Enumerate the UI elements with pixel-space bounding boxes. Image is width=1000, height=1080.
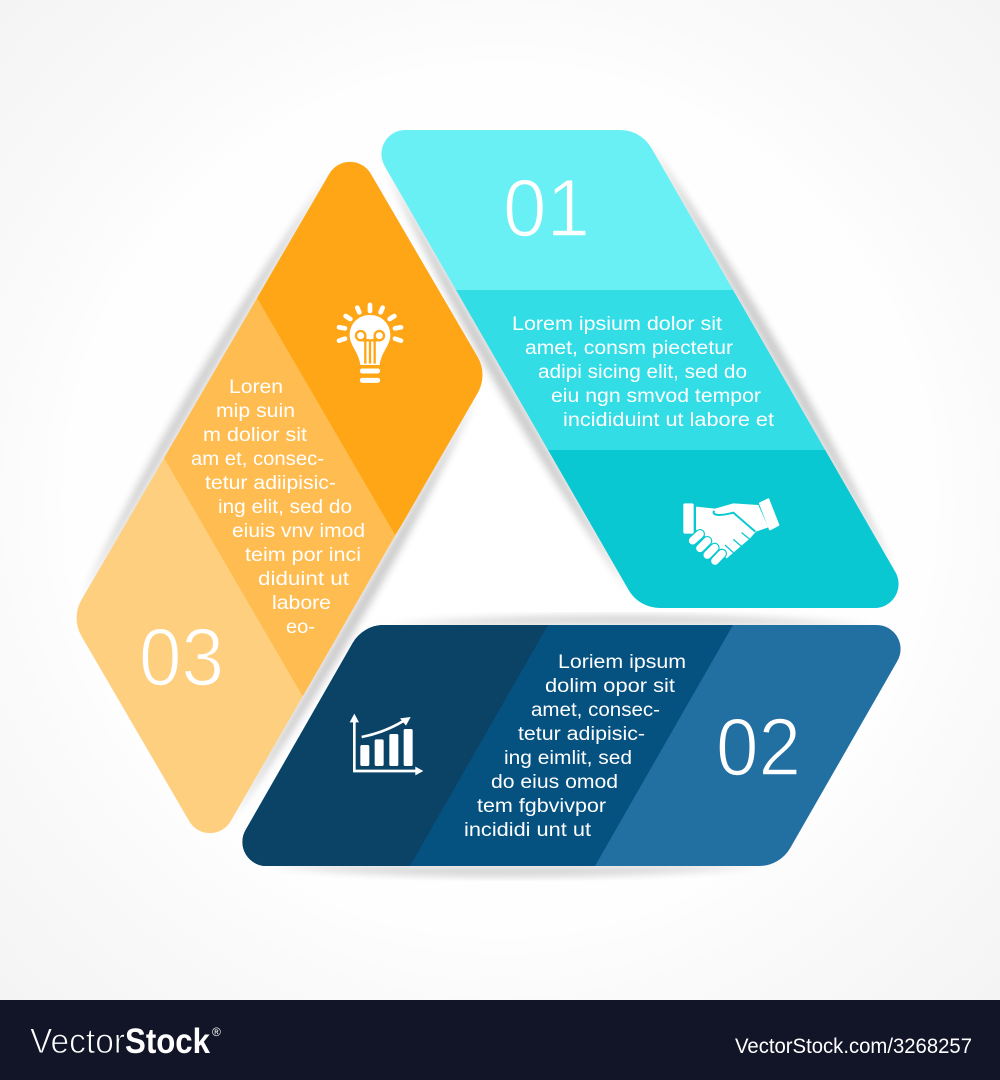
number 03: 03: [139, 612, 224, 703]
icon: bar chart with rising arrow: [350, 714, 423, 775]
panel 02 body text: ing eimlit, sed: [504, 748, 632, 769]
panel 02 body text: dolim opor sit: [545, 676, 676, 697]
number 01: 01: [503, 163, 590, 254]
number 02: 02: [716, 702, 801, 793]
icon: light bulb: [339, 305, 401, 380]
panel 01 body text: incididuint ut labore et: [563, 410, 775, 431]
VectorStock logo: Vector: [30, 1022, 125, 1061]
panel 02: navy: [220, 615, 920, 877]
panel 01 body text: [512, 314, 775, 431]
panel 03 body text: am et, consec-: [191, 449, 324, 470]
panel 02 body text: do eius omod: [491, 772, 618, 793]
panel 01 bands: [381, 130, 899, 608]
panel 03: orange: [76, 162, 482, 834]
panel 03 body text: eo-: [286, 617, 315, 638]
panel 01: cyan: [381, 130, 899, 608]
panel 03 body text: diduint ut: [258, 569, 350, 590]
registered mark: ®: [212, 1025, 221, 1039]
panel 01 body text: adipi sicing elit, sed do: [538, 362, 747, 383]
panel 03 body text: labore: [272, 593, 331, 614]
panel 02 body text: Loriem ipsum: [558, 652, 686, 673]
icon: handshake: [683, 499, 778, 561]
VectorStock logo: Stock: [125, 1022, 210, 1061]
panel 02 body text: [464, 652, 686, 841]
panel 03 body text: eiuis vnv imod: [232, 521, 365, 542]
image id: VectorStock.com/3268257: [735, 1035, 972, 1058]
panel 02 body text: amet, consec-: [531, 700, 660, 721]
panel 03 body text: mip suin: [216, 401, 295, 422]
panel 01 body text: amet, consm piectetur: [525, 338, 734, 359]
panel 02 body text: tem fgbvivpor: [477, 796, 607, 817]
panel 03 body text: m dolior sit: [203, 425, 308, 446]
panel 02 bands: [220, 620, 920, 870]
panel 03 body text: teim por inci: [245, 545, 361, 566]
panel 03 body text: [191, 377, 365, 638]
panel 01 body text: eiu ngn smvod tempor: [551, 386, 762, 407]
panel 02 body text: tetur adipisic-: [518, 724, 645, 745]
panel 03 body text: Loren: [229, 377, 283, 398]
panel 01 body text: Lorem ipsium dolor sit: [512, 314, 723, 335]
panel 02 body text: incididi unt ut: [464, 820, 592, 841]
panel 03 body text: ing elit, sed do: [218, 497, 352, 518]
panel 03 body text: tetur adiipisic-: [205, 473, 336, 494]
footer bar: [0, 1000, 1000, 1080]
panel 03 bands: [76, 162, 482, 834]
VectorStock logo: [30, 1022, 210, 1061]
